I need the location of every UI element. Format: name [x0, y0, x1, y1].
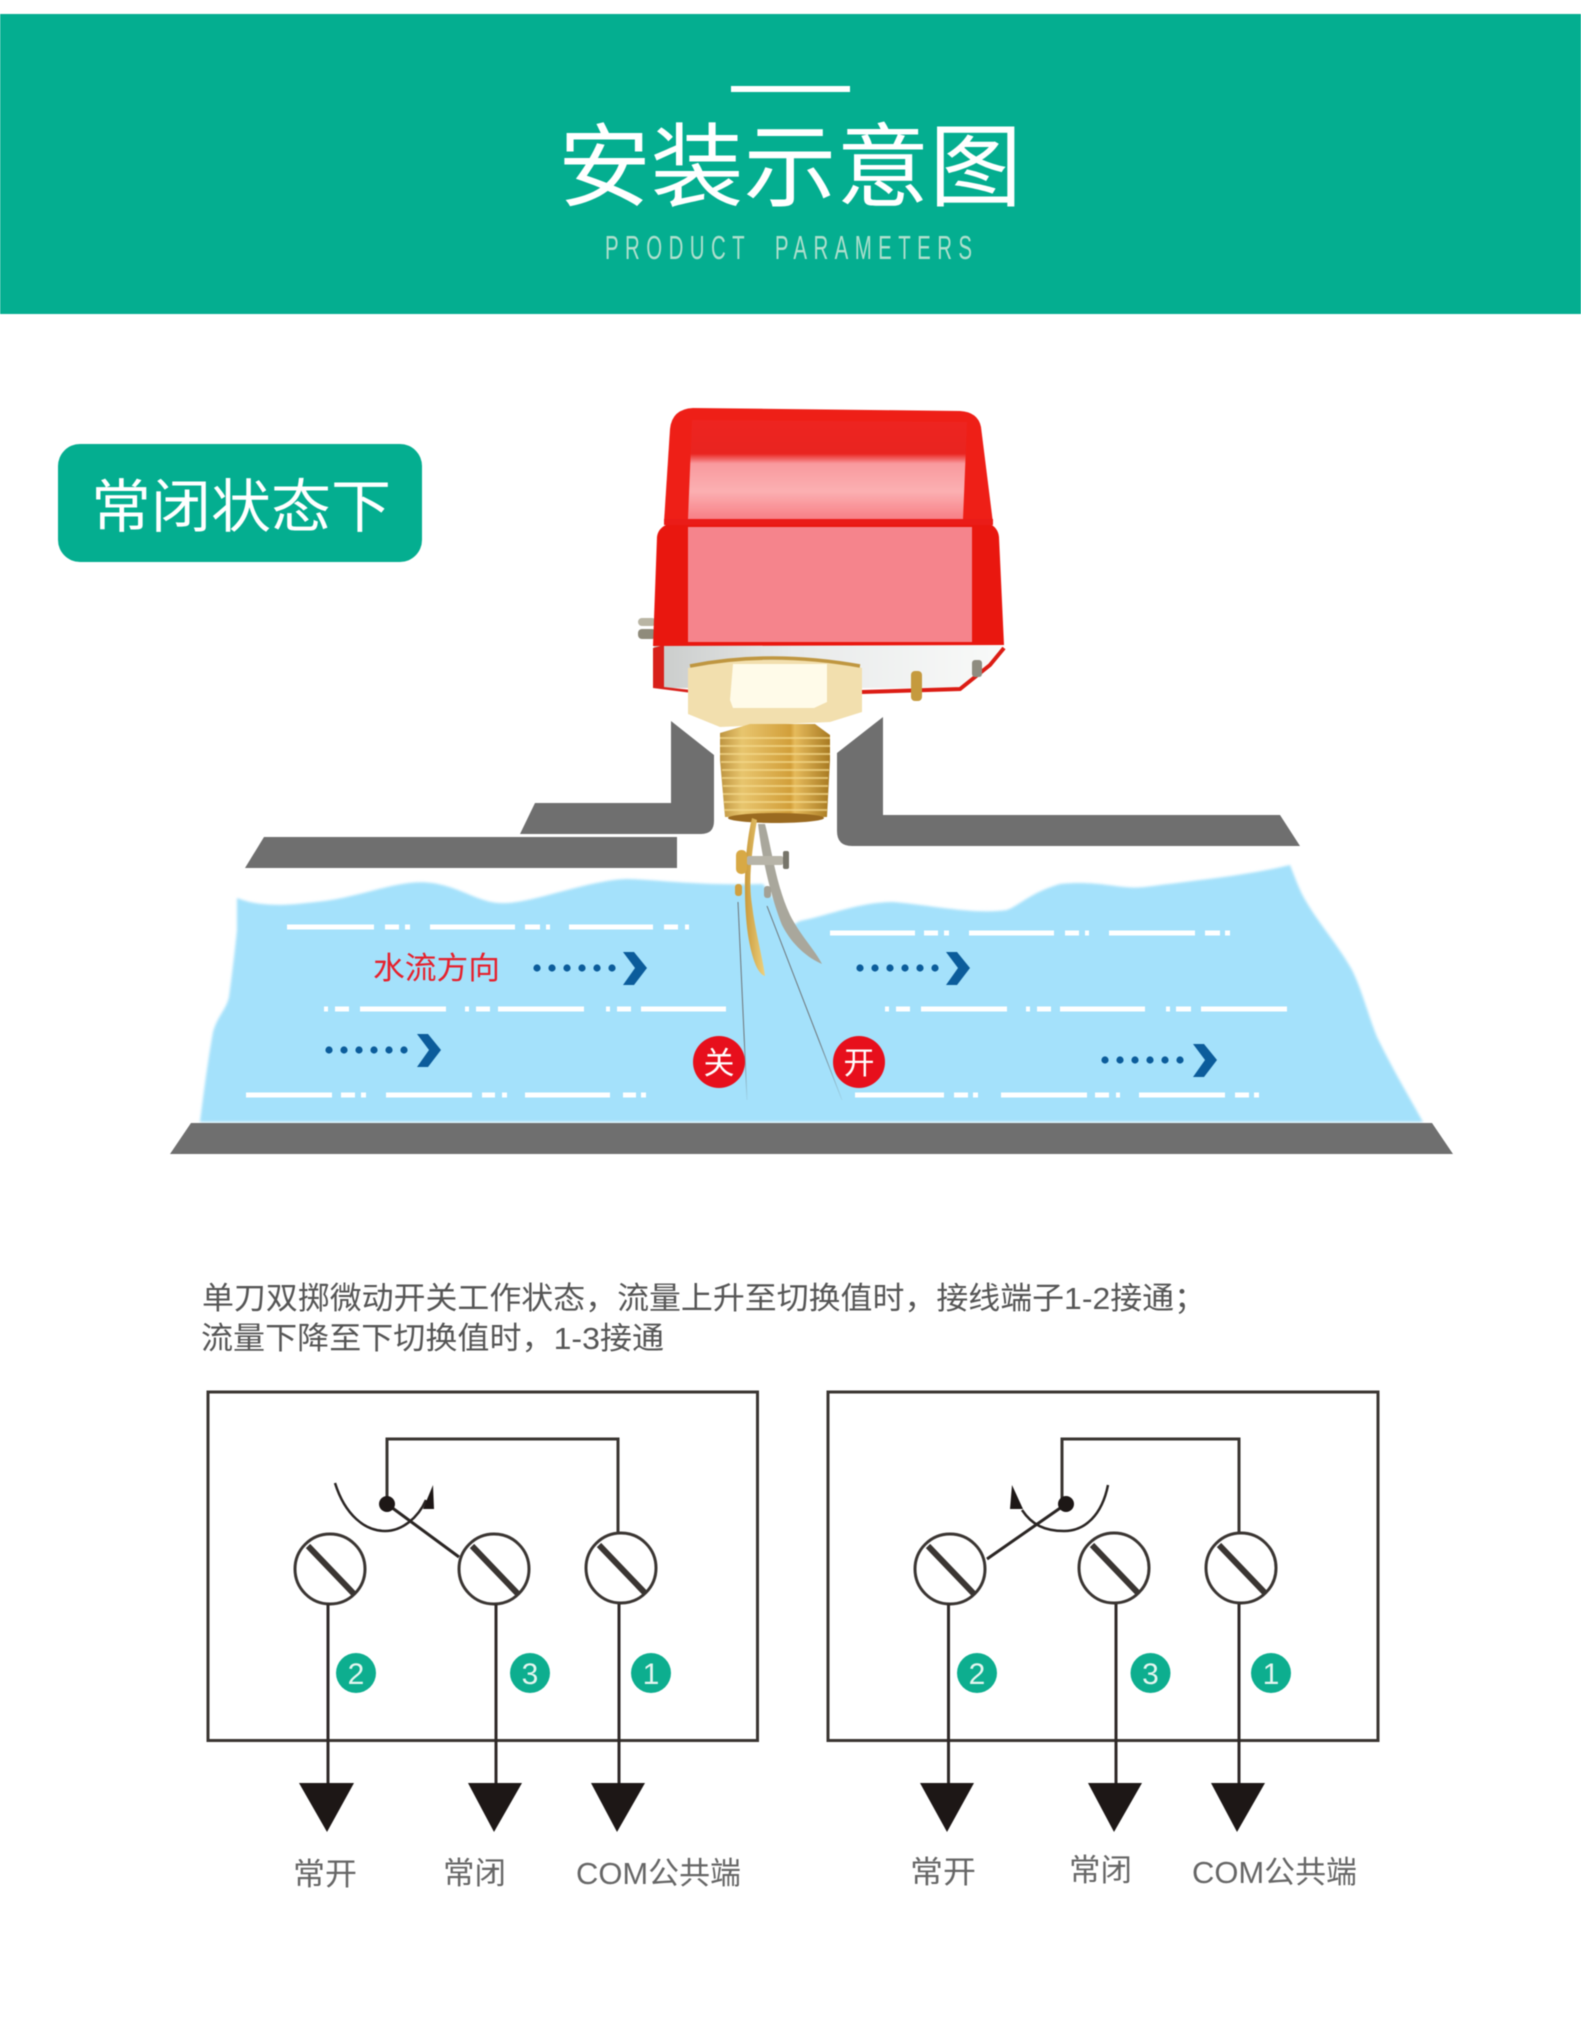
brass paddle — [745, 818, 765, 976]
terminal labels — [910, 1853, 1357, 1890]
state badge: normally closed: 常闭状态下 — [91, 475, 391, 540]
switch arm — [987, 1504, 1066, 1559]
terminal labels: 常闭 — [443, 1856, 506, 1891]
indicator line: closed — [738, 902, 747, 1100]
terminal labels — [293, 1856, 741, 1892]
header accent line — [731, 86, 850, 92]
pipe and water diagram — [170, 717, 1453, 1154]
terminal 3 — [459, 1534, 529, 1604]
switch arm — [387, 1504, 459, 1557]
common wire — [387, 1439, 618, 1534]
rotation arc — [1022, 1485, 1108, 1531]
terminal 2 — [915, 1534, 985, 1604]
terminal labels: 常闭 — [1069, 1853, 1132, 1888]
paddle bolt — [736, 850, 789, 874]
number badge 3: 3 — [522, 1658, 538, 1691]
terminal labels: COM公共端 — [576, 1856, 741, 1891]
flow arrow 2 — [856, 952, 970, 985]
base rim right — [862, 648, 1004, 692]
subtitle: PRODUCT PARAMETERS — [605, 229, 972, 266]
terminal labels: 常开 — [910, 1855, 976, 1890]
side screw — [638, 618, 656, 639]
terminal labels: COM公共端 — [1192, 1855, 1357, 1890]
output arrowheads — [299, 1783, 645, 1832]
terminal labels: 常开 — [293, 1857, 357, 1892]
number badge 2 — [336, 1653, 376, 1693]
output wires — [948, 1604, 1239, 1790]
thread end — [728, 813, 824, 823]
flow arrow 1 — [533, 952, 647, 985]
terminal 1 — [586, 1533, 656, 1603]
number badge 1: 1 — [1263, 1658, 1279, 1691]
number badge 1: 1 — [643, 1658, 659, 1691]
indicator line: open — [767, 906, 842, 1100]
flow arrow 4 — [1101, 1044, 1217, 1077]
thread body — [720, 724, 830, 817]
number badge 2 — [957, 1653, 997, 1693]
cap seam — [664, 519, 993, 525]
upper-left pipe wall with boss — [520, 721, 714, 834]
enclosure box — [208, 1392, 758, 1740]
lower housing face — [688, 527, 972, 642]
number badge 1 — [1251, 1653, 1291, 1693]
terminal 1 — [1206, 1533, 1276, 1603]
flow direction label: 水流方向 — [373, 951, 500, 986]
output wires — [328, 1604, 619, 1790]
silver base plate — [653, 640, 1004, 688]
wiring diagram left — [208, 1392, 758, 1892]
right pipe wall with boss — [837, 717, 1300, 846]
enclosure box — [828, 1392, 1378, 1740]
state badge: normally closed — [58, 444, 422, 562]
arc arrowhead — [1010, 1485, 1023, 1509]
closed marker — [693, 1036, 745, 1088]
title: 安装示意图 — [558, 118, 1022, 219]
flow switch device — [638, 408, 1004, 976]
number badge 2: 2 — [348, 1658, 364, 1691]
closed marker: 关 — [704, 1046, 734, 1081]
brass flange — [688, 660, 862, 727]
red lower housing — [653, 523, 1004, 646]
number badge 2: 2 — [969, 1658, 985, 1691]
arc arrowhead — [423, 1485, 434, 1509]
header banner — [0, 14, 1581, 314]
base rim left — [653, 645, 700, 694]
description text: 流量下降至下切换值时，1-3接通 — [201, 1321, 664, 1356]
pivot — [1058, 1496, 1074, 1512]
flange lip — [690, 658, 860, 666]
number badge 3: 3 — [1142, 1658, 1159, 1691]
side pin — [911, 671, 922, 701]
side screw right — [972, 660, 982, 677]
pivot — [379, 1496, 395, 1512]
cap face — [688, 420, 967, 519]
number badge 3 — [510, 1653, 550, 1693]
number badge 1 — [631, 1653, 671, 1693]
common wire — [1062, 1439, 1239, 1534]
flow dashes — [246, 927, 1287, 1095]
terminal 2 — [295, 1534, 365, 1604]
open marker: 开 — [844, 1046, 874, 1081]
thread ridges — [720, 738, 830, 810]
wiring diagram right — [828, 1392, 1378, 1890]
flow arrow 3 — [325, 1034, 441, 1067]
red cap — [664, 408, 993, 523]
lower-left pipe wall — [245, 837, 677, 868]
paddle small screws — [735, 884, 771, 898]
hex face — [730, 664, 827, 708]
water body — [200, 865, 1423, 1122]
rotation arc — [335, 1483, 426, 1531]
open marker — [833, 1036, 885, 1088]
output arrowheads — [920, 1783, 1265, 1832]
terminal 3 — [1079, 1533, 1149, 1603]
silver paddle — [758, 824, 822, 964]
description text — [201, 1281, 1206, 1356]
bottom pipe wall — [170, 1123, 1453, 1154]
number badge 3 — [1130, 1653, 1170, 1693]
description text: 单刀双掷微动开关工作状态，流量上升至切换值时，接线端子1-2接通； — [202, 1281, 1206, 1316]
